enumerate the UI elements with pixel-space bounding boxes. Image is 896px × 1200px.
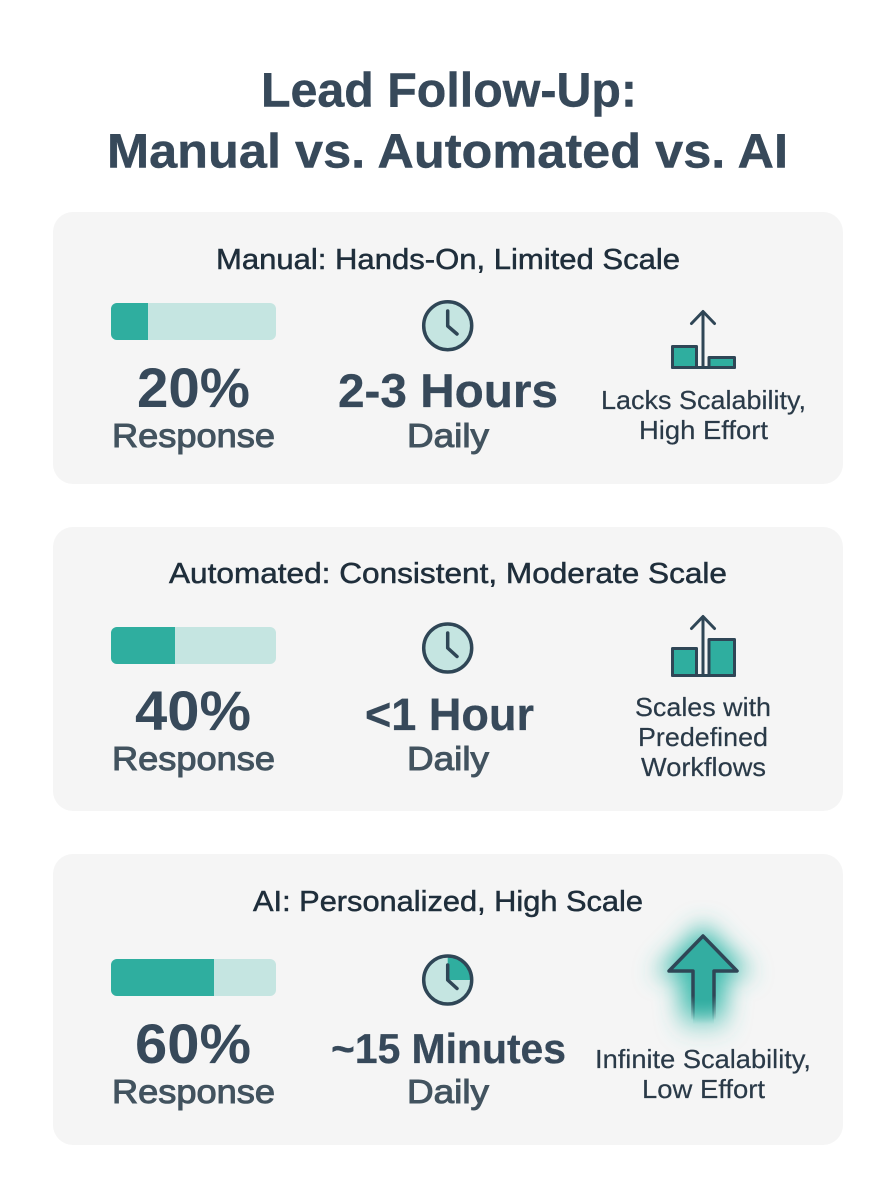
title [107, 64, 788, 178]
icon: glowing up arrow [654, 924, 752, 1034]
text: scalability note: Infinite Scalability, [595, 1044, 811, 1074]
stat: time spent [331, 1025, 566, 1111]
stat: 20% response: Response [112, 418, 275, 455]
stat: time spent: Daily [407, 1074, 489, 1111]
stat: 60% response: 60% [135, 1012, 251, 1075]
text: scalability note: Workflows [641, 752, 766, 782]
text: scalability note [635, 692, 771, 782]
text: scalability note [601, 385, 806, 445]
icon: clock [424, 624, 472, 672]
stat: 20% response [112, 356, 275, 455]
icon: moderate scale bars with arrow [672, 616, 734, 676]
title: Manual vs. Automated vs. AI [107, 126, 788, 178]
stat: 40% response: Response [112, 741, 275, 778]
stat: 60% response [112, 1012, 275, 1111]
heading: manual: Manual: Hands-On, Limited Scale [216, 244, 680, 276]
icon: clock [424, 302, 472, 350]
progress bar: 60% [111, 959, 276, 996]
title: Lead Follow-Up: [261, 64, 637, 118]
panel: ai [53, 854, 843, 1145]
stat: time spent: 2-3 Hours [338, 364, 558, 417]
icon: low scale bars with arrow [672, 312, 734, 368]
stat: time spent: <1 Hour [365, 689, 534, 740]
stat: 40% response: 40% [135, 679, 251, 742]
progress bar: 40% [111, 627, 276, 664]
text: scalability note [595, 1044, 811, 1104]
heading: ai: AI: Personalized, High Scale [253, 886, 643, 918]
panel: manual [53, 212, 843, 484]
heading: automated: Automated: Consistent, Moderate Scale [169, 558, 727, 590]
icon: clock with quarter wedge [424, 956, 472, 1004]
stat: time spent: Daily [407, 741, 489, 778]
panel: automated [53, 527, 843, 811]
stat: 60% response: Response [112, 1074, 275, 1111]
text: scalability note: Scales with [635, 692, 771, 722]
text: scalability note: High Effort [639, 415, 769, 445]
stat: time spent [338, 364, 558, 455]
stat: 40% response [112, 679, 275, 778]
progress bar: 20% [111, 303, 276, 340]
text: scalability note: Low Effort [642, 1074, 766, 1104]
stat: time spent: ~15 Minutes [331, 1025, 566, 1072]
stat: time spent: Daily [407, 418, 489, 455]
stat: time spent [365, 689, 534, 778]
stat: 20% response: 20% [137, 356, 250, 419]
text: scalability note: Predefined [638, 722, 768, 752]
text: scalability note: Lacks Scalability, [601, 385, 806, 415]
